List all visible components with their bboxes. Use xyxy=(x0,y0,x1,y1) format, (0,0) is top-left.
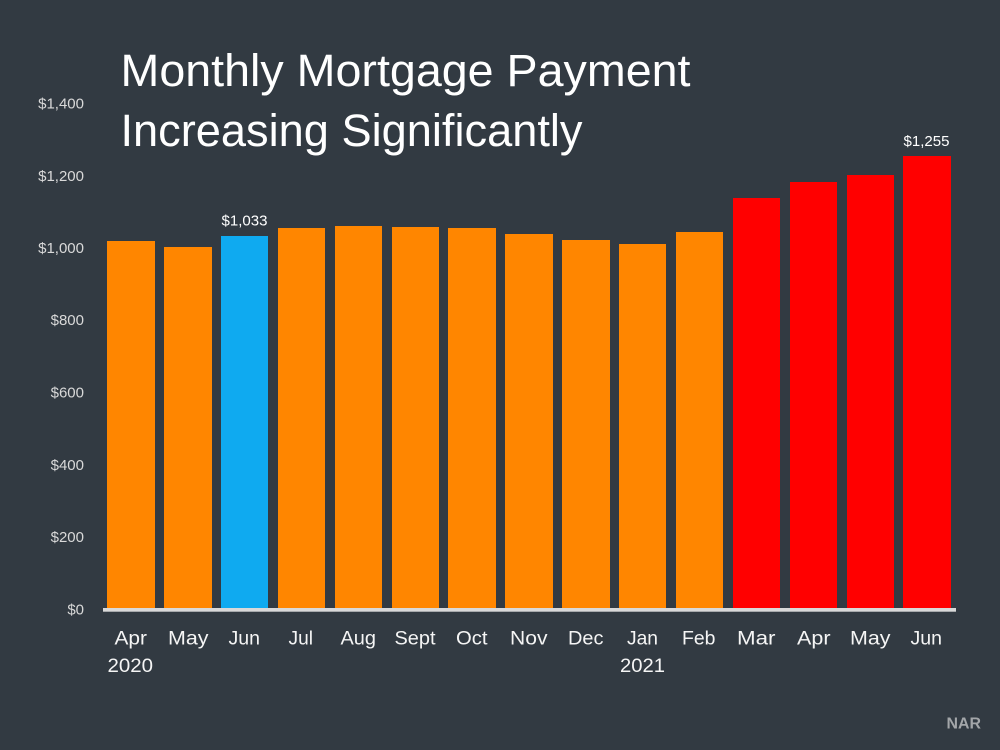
x axis labels: Feb xyxy=(682,628,716,650)
x axis labels xyxy=(108,628,942,677)
x axis labels: Mar xyxy=(737,628,776,650)
x axis labels: Jun xyxy=(910,628,942,650)
x axis labels: Sept xyxy=(394,628,436,650)
x axis labels: May xyxy=(168,628,209,650)
x axis labels: Jul xyxy=(288,628,313,650)
y axis labels: $0 xyxy=(67,602,84,618)
bar chart xyxy=(107,156,951,608)
x axis labels: Nov xyxy=(510,628,548,650)
x axis labels: Oct xyxy=(456,628,488,650)
x axis labels: Jan xyxy=(627,628,658,650)
y axis labels: $400 xyxy=(51,457,84,474)
x axis labels: 2021 xyxy=(620,656,665,677)
x axis labels: Jun xyxy=(228,628,260,650)
title: Monthly Mortgage Payment xyxy=(120,45,691,96)
value label: June 2020: $1,033 xyxy=(222,212,268,230)
y axis labels: $1,000 xyxy=(38,240,84,257)
title: Increasing Significantly xyxy=(120,105,583,156)
x axis labels: Apr xyxy=(114,628,148,650)
x axis baseline xyxy=(103,608,956,612)
y axis labels: $1,400 xyxy=(38,96,84,112)
x axis labels: May xyxy=(850,628,891,650)
x axis labels: Apr xyxy=(797,628,831,650)
x axis labels: Aug xyxy=(340,628,376,650)
y axis labels: $200 xyxy=(51,529,84,546)
y axis labels: $600 xyxy=(51,384,84,402)
y axis labels: $1,200 xyxy=(38,168,84,185)
y axis labels: $800 xyxy=(51,312,84,329)
value label: June 2021: $1,255 xyxy=(904,133,950,150)
title xyxy=(120,45,691,156)
x axis labels: Dec xyxy=(568,628,604,650)
x axis labels: 2020 xyxy=(108,656,153,677)
y axis labels xyxy=(38,96,84,618)
source label: NAR xyxy=(946,716,981,732)
